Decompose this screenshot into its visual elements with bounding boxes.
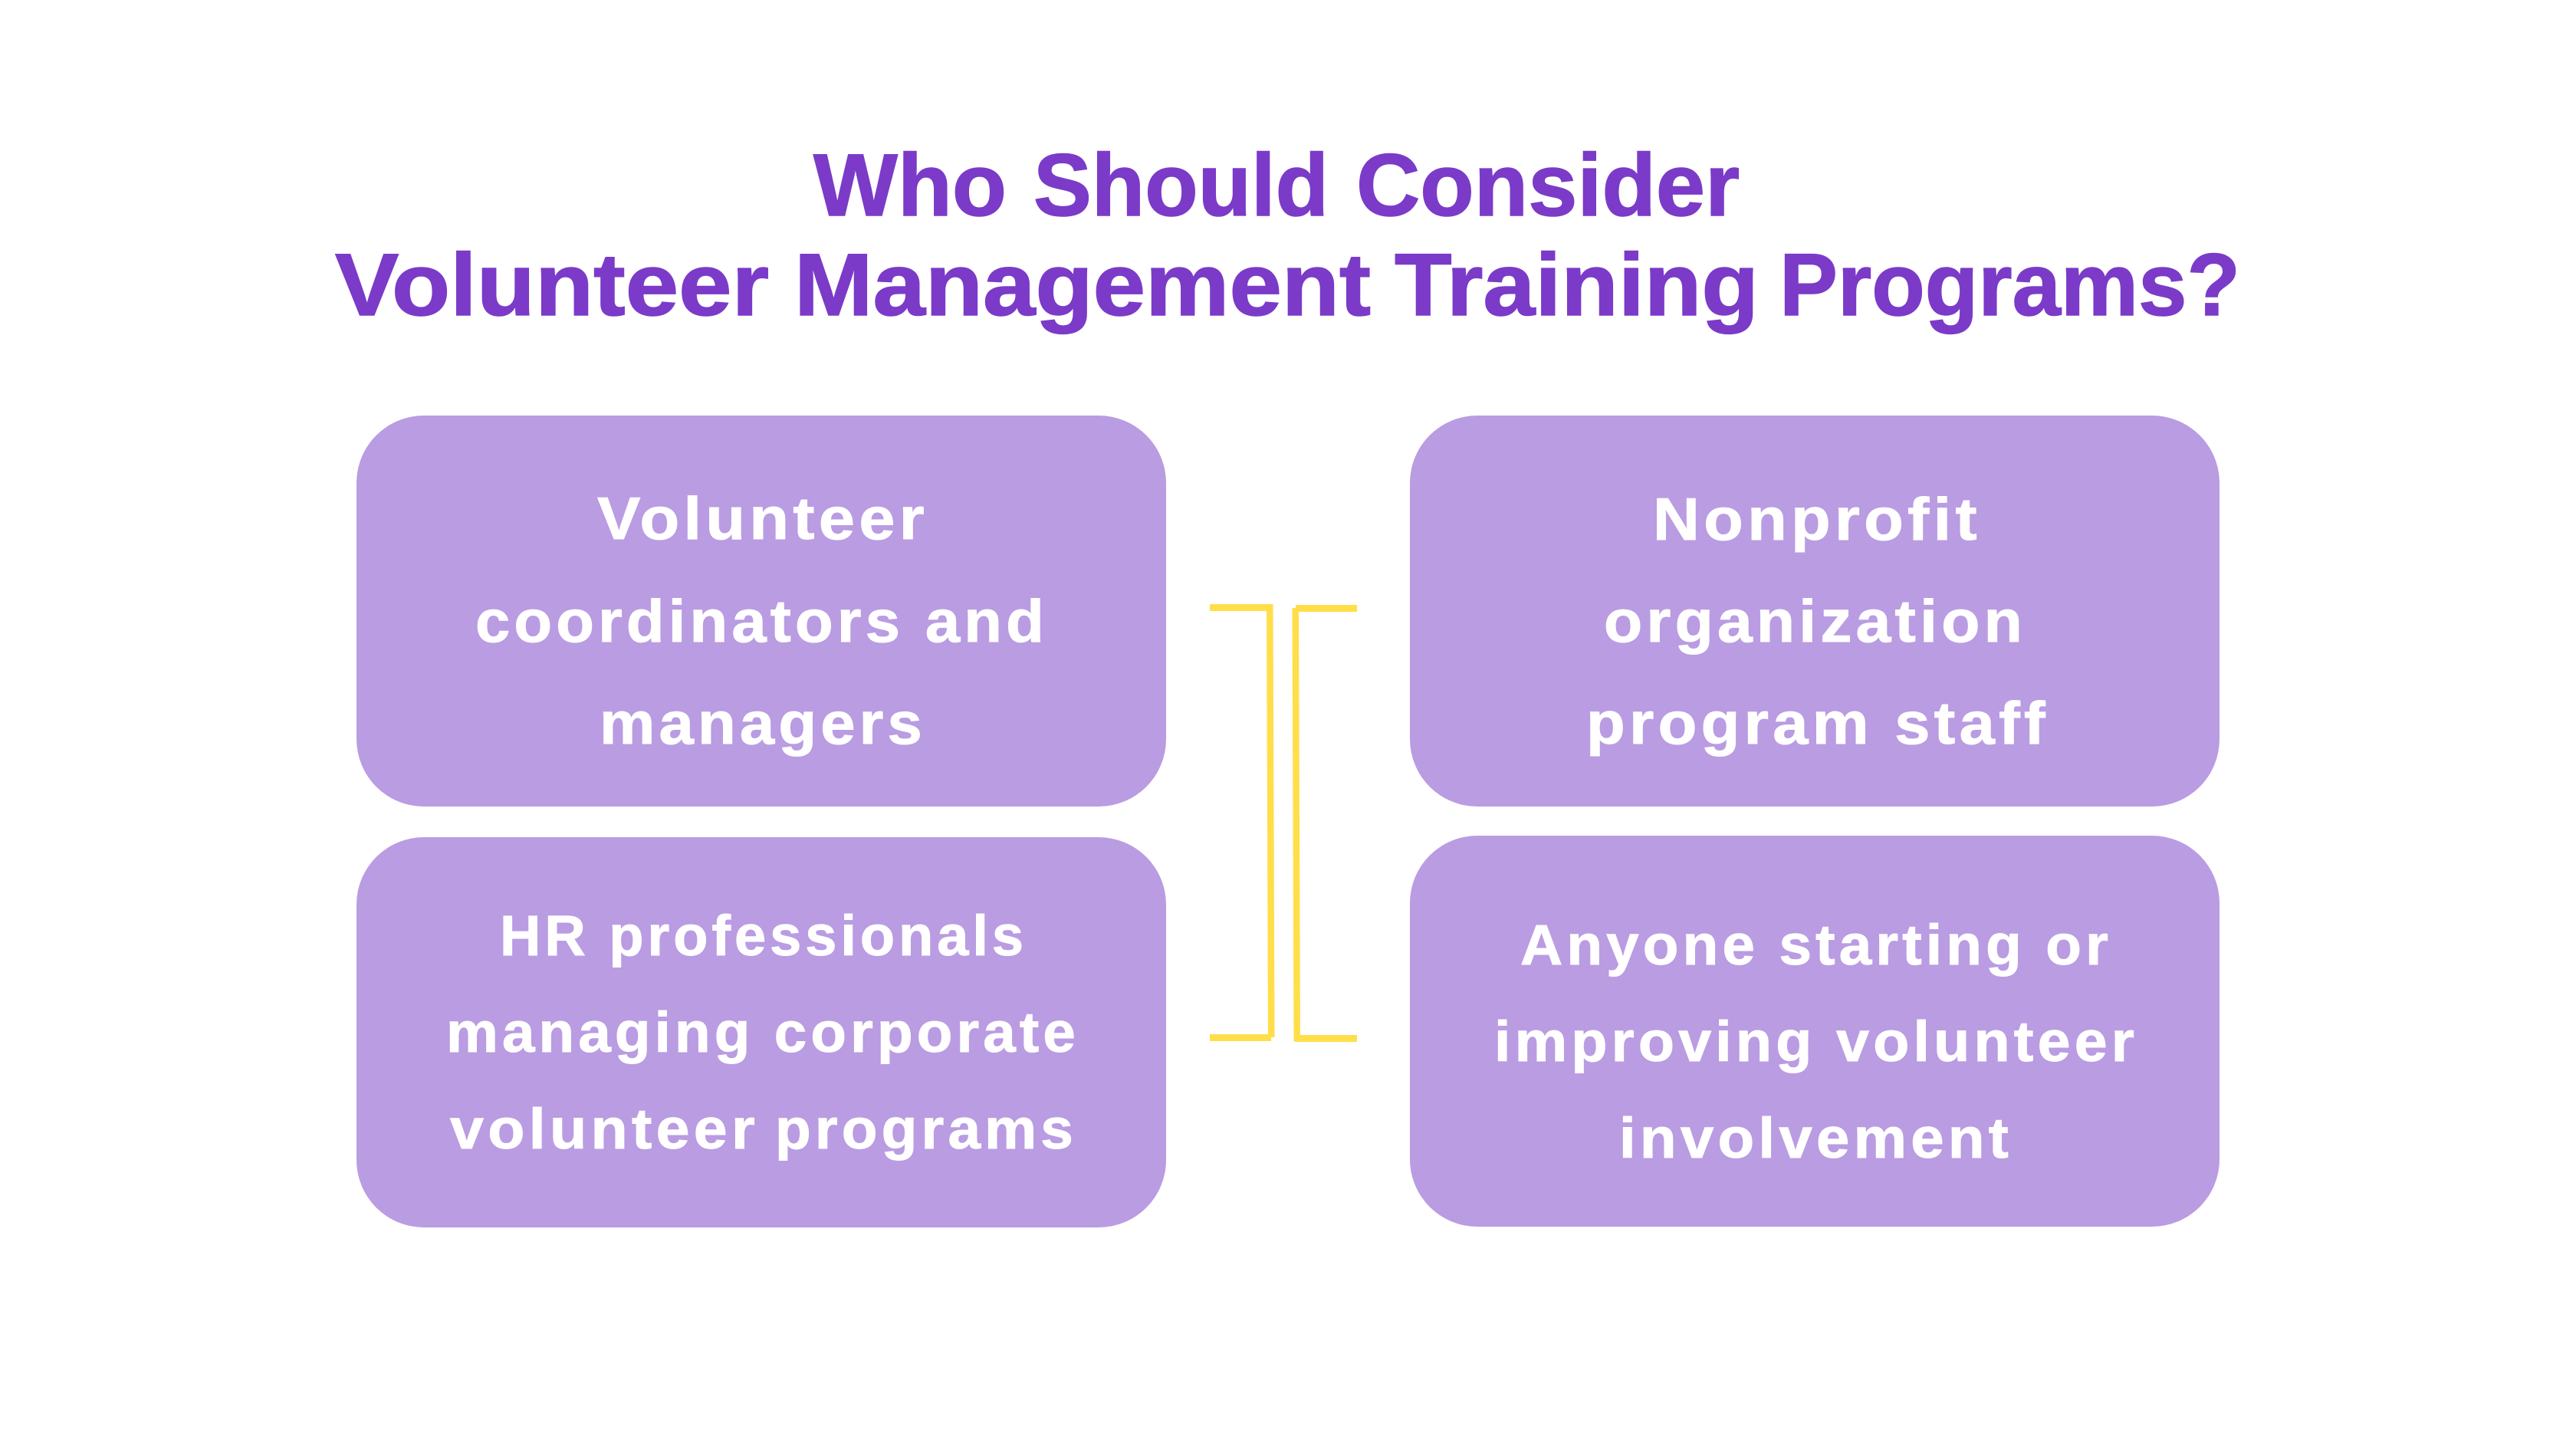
panel text: anyone starting or improving volunteer involvement: Anyone starting or	[1520, 913, 2112, 977]
panel text: anyone starting or improving volunteer involvement: improving volunteer	[1494, 1010, 2138, 1073]
title: Who	[813, 136, 1007, 235]
panel: nonprofit organization program staff	[1410, 416, 2220, 807]
panel: HR professionals	[356, 837, 1166, 1227]
panel: volunteer coordinators and managers	[356, 416, 1166, 807]
panel text: nonprofit organization program staff: organization	[1604, 587, 2026, 655]
panel text: HR professionals: volunteer	[450, 1097, 759, 1161]
panel text: HR professionals: programs	[775, 1097, 1077, 1161]
panel: anyone starting or improving volunteer involvement	[1410, 836, 2220, 1227]
title: Programs?	[1779, 236, 2240, 334]
panel text: volunteer coordinators and managers: coordinators and	[475, 587, 1048, 655]
panel text: nonprofit organization program staff	[1586, 485, 2049, 757]
title	[335, 136, 2240, 334]
panel text: HR professionals	[446, 904, 1079, 1161]
panel text: nonprofit organization program staff: program staff	[1586, 689, 2049, 757]
panel text: anyone starting or improving volunteer involvement: involvement	[1619, 1106, 2013, 1170]
title: Should	[1033, 136, 1329, 235]
panel text: HR professionals: managing corporate	[446, 1001, 1079, 1064]
left bracket connector	[1210, 604, 1274, 1041]
panel text: HR professionals: HR professionals	[500, 904, 1027, 968]
panel text: volunteer coordinators and managers	[475, 485, 1048, 757]
title: Consider	[1356, 136, 1740, 235]
title: Management	[794, 236, 1371, 334]
right bracket connector	[1293, 605, 1357, 1042]
panel text: nonprofit organization program staff: Nonprofit	[1653, 485, 1981, 553]
title: Training	[1395, 236, 1759, 334]
panel text: volunteer coordinators and managers: Volunteer	[597, 485, 928, 552]
panel text: anyone starting or improving volunteer involvement	[1494, 913, 2138, 1170]
title: Volunteer	[335, 236, 769, 334]
panel text: volunteer coordinators and managers: managers	[600, 689, 926, 757]
